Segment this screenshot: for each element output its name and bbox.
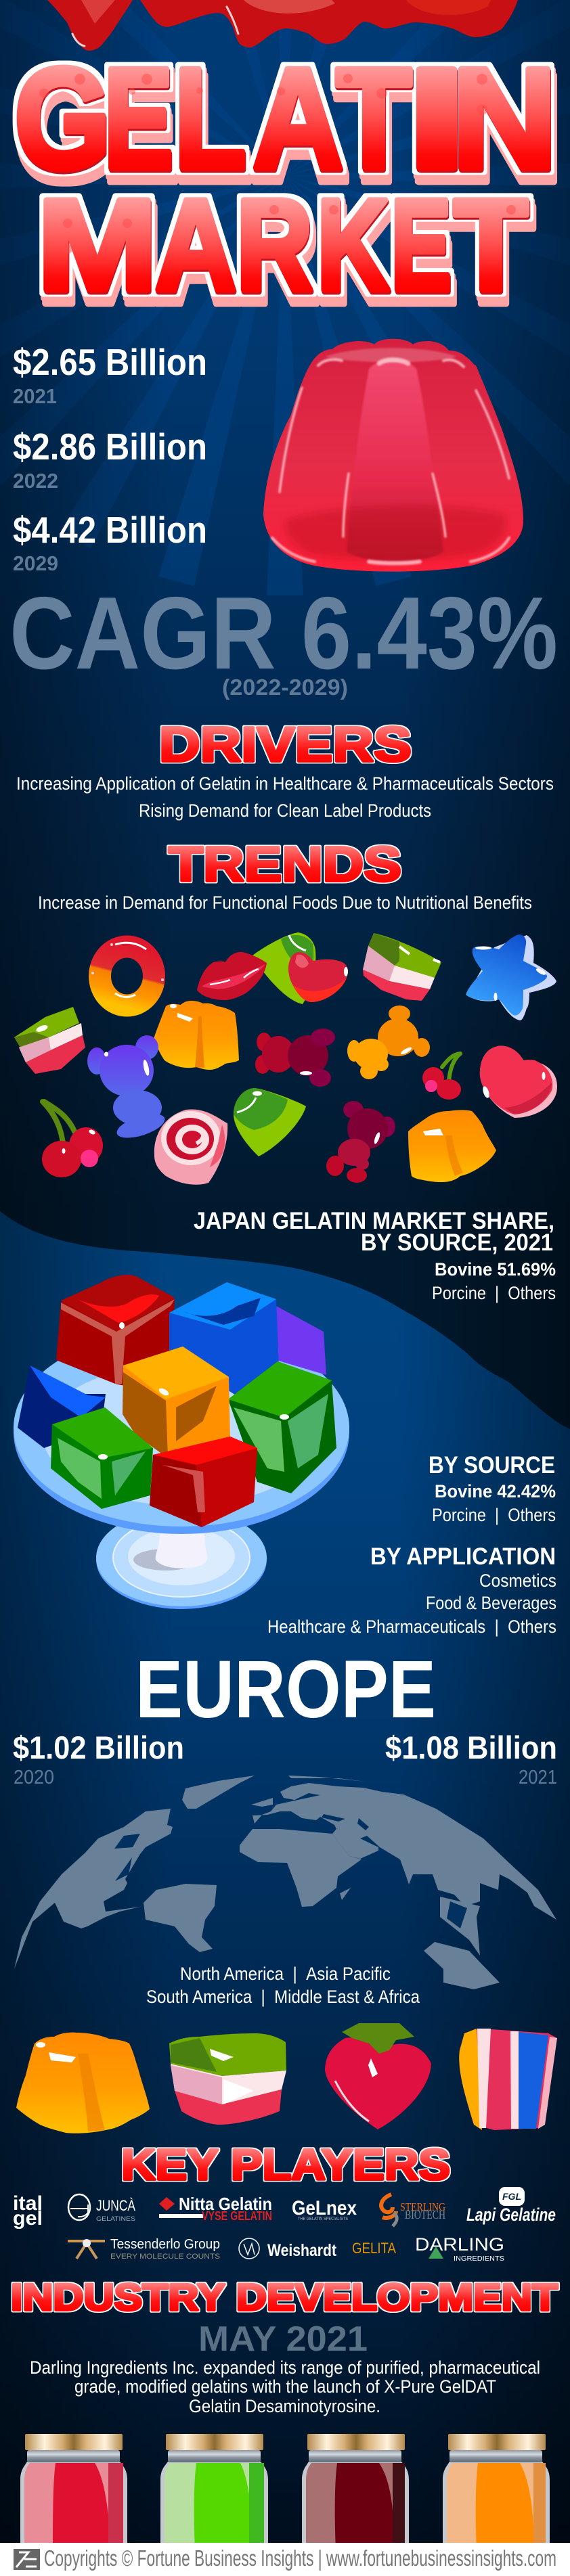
development description xyxy=(30,2357,540,2416)
other regions list: North America | Asia Pacific xyxy=(180,1964,391,1984)
world map globe xyxy=(14,1776,556,1989)
logo: Darling Ingredients xyxy=(415,2234,504,2263)
logo: Sterling Biotech: STERLING xyxy=(400,2200,445,2213)
Europe 2021 value: $1.08 Billion xyxy=(385,1730,557,1765)
candy: orange mold xyxy=(16,2033,150,2133)
other regions list: South America | Middle East & Africa xyxy=(146,1987,420,2007)
footer bar xyxy=(0,2543,570,2576)
by source segment list: Bovine 42.42% xyxy=(435,1481,556,1501)
title word: Market: T xyxy=(454,172,528,317)
heading: Drivers: DRIVERS xyxy=(159,718,412,772)
candy: strawberry xyxy=(325,2023,431,2129)
by application segment list: Cosmetics xyxy=(479,1571,556,1591)
logo: Gelnex: THE GELATIN SPECIALISTS xyxy=(298,2217,348,2221)
logo: Nitta Gelatin: Nitta Gelatin xyxy=(179,2194,272,2214)
candy: ring xyxy=(91,943,164,1005)
candy: orange bear xyxy=(347,1005,430,1079)
logo: Lapi Gelatine: FGL xyxy=(502,2191,521,2202)
candy: green wedge xyxy=(253,932,315,1004)
jar: dark red xyxy=(302,2434,409,2551)
by source segment list: Porcine | Others xyxy=(432,1505,556,1525)
development date: MAY 2021 xyxy=(198,2320,368,2359)
cube: blue back xyxy=(169,1282,279,1396)
other regions list xyxy=(146,1964,420,2007)
logo: Junca: JUNCÀ xyxy=(96,2197,135,2214)
logo: Italgel: ital xyxy=(13,2192,43,2215)
candy: blue star xyxy=(466,934,556,1020)
glass plate xyxy=(14,1329,349,1534)
stat: 2022 market value: 2022 xyxy=(13,469,58,493)
development description: Gelatin Desaminotyrosine. xyxy=(189,2396,380,2416)
logo: Gelnex: GeLnex xyxy=(292,2197,357,2219)
Europe 2021 value: 2021 xyxy=(519,1767,557,1788)
logo: Darling Ingredients: INGREDIENTS xyxy=(454,2255,504,2263)
candy: layered cube xyxy=(169,2033,286,2125)
region heading: Europe: EUROPE xyxy=(135,1643,436,1735)
CAGR value: (2022-2029) xyxy=(222,675,348,700)
title word: Market: A xyxy=(155,172,236,317)
candy: lips xyxy=(197,952,267,1000)
company logos xyxy=(13,2187,556,2263)
cube: red front xyxy=(150,1437,257,1527)
logo: Tessenderlo Group: EVERY MOLECULE COUNTS xyxy=(110,2253,220,2261)
stat: 2022 market value: $2.86 Billion xyxy=(13,426,207,468)
title word: Market: E xyxy=(391,172,452,317)
stat: 2021 market value: 2021 xyxy=(13,384,57,408)
title word: Gelatin: A xyxy=(253,38,343,198)
Japan market share text: BY SOURCE, 2021 xyxy=(361,1229,553,1256)
title word: Gelatin: T xyxy=(336,38,412,198)
logo: Italgel xyxy=(13,2192,43,2230)
stat: 2029 market value: $4.42 Billion xyxy=(13,509,207,551)
candy: striped jelly xyxy=(459,2029,557,2130)
jar: orange xyxy=(443,2434,550,2551)
Europe 2020 value: 2020 xyxy=(14,1767,54,1788)
logo: Tessenderlo Group: Tessenderlo Group xyxy=(110,2237,220,2252)
logo: Darling Ingredients: DARLING xyxy=(415,2234,504,2255)
logo: Nitta Gelatin: VYSE GELATIN xyxy=(202,2209,272,2223)
by source segment list xyxy=(429,1452,556,1525)
title word: Market: K xyxy=(317,172,389,317)
cube: red back xyxy=(56,1275,175,1395)
stat: 2021 market value: $2.65 Billion xyxy=(13,341,207,383)
candy: purple bear xyxy=(87,1035,168,1143)
candy: green wedge lower xyxy=(234,1088,306,1156)
drivers list xyxy=(16,773,554,821)
title: Gelatin Market xyxy=(14,38,557,317)
logo: Gelita: GELITA xyxy=(352,2240,396,2257)
candy: wine bear xyxy=(326,1101,395,1183)
candy: heart xyxy=(288,952,348,1002)
title word: Market: R xyxy=(236,172,313,317)
logo: Lapi Gelatine xyxy=(466,2187,556,2225)
Japan market share text xyxy=(194,1208,556,1303)
footer logo xyxy=(14,2549,40,2570)
candy: layered cube xyxy=(363,933,441,1001)
title word: Gelatin: E xyxy=(104,38,173,198)
candy: dark red bear xyxy=(255,1029,335,1087)
logo: Sterling Biotech xyxy=(381,2194,445,2226)
candy: left layered cube xyxy=(14,1007,85,1074)
candy: large cherries xyxy=(42,1102,103,1177)
title word: Gelatin: N xyxy=(452,38,557,198)
stat: 2021 market value xyxy=(13,341,207,408)
Europe 2020 value: $1.02 Billion xyxy=(13,1730,184,1765)
heading: Key Players: KEY PLAYERS xyxy=(121,2140,450,2189)
candy: swirl roll xyxy=(154,1109,227,1185)
scattered gummy candies xyxy=(14,932,557,1185)
heading: Industry Development: INDUSTRY DEVELOPMENT xyxy=(11,2276,558,2318)
heading: Trends: TRENDS xyxy=(169,838,401,892)
bowl of jelly cubes xyxy=(14,1275,349,1609)
logo: Junca: GELATINES xyxy=(96,2215,135,2222)
cube: blue left xyxy=(18,1365,106,1448)
by source segment list: BY SOURCE xyxy=(429,1452,555,1478)
logo: Junca xyxy=(68,2194,135,2222)
candy: red heart xyxy=(480,1046,557,1118)
jar: green xyxy=(160,2434,268,2551)
logo: Weishardt xyxy=(239,2238,337,2260)
development description: grade, modified gelatins with the launch of X-Pure GelDAT xyxy=(74,2376,496,2397)
title word: Gelatin: L xyxy=(174,38,246,198)
candy: small cherries xyxy=(422,1054,461,1100)
title word: Gelatin: G xyxy=(14,38,111,198)
candy: orange mold xyxy=(154,1001,239,1070)
pedestal base xyxy=(96,1509,267,1609)
cube: purple xyxy=(276,1306,326,1375)
Europe 2020 value xyxy=(13,1730,184,1788)
logo: Weishardt: Weishardt xyxy=(267,2241,337,2260)
Japan market share text: Porcine | Others xyxy=(432,1283,556,1303)
title word: Gelatin: I xyxy=(406,38,467,198)
stat: 2029 market value xyxy=(13,509,207,575)
title word: Gelatin xyxy=(14,38,557,198)
stat: 2029 market value: 2029 xyxy=(13,551,58,575)
title word: Market: M xyxy=(37,172,157,317)
Japan market share text: Bovine 51.69% xyxy=(435,1259,556,1280)
candy row xyxy=(16,2023,557,2133)
title word: Market xyxy=(37,172,528,317)
Europe 2021 value xyxy=(385,1730,557,1788)
cube: green left xyxy=(51,1407,153,1509)
logo: Tessenderlo Group xyxy=(68,2237,220,2261)
candy: orange mold lower xyxy=(408,1110,496,1182)
jar: red xyxy=(20,2434,127,2551)
red jelly drip xyxy=(47,0,518,51)
stat: 2022 market value xyxy=(13,426,207,493)
drivers list: Rising Demand for Clean Label Products xyxy=(139,800,431,821)
logo: Nitta Gelatin xyxy=(159,2194,272,2223)
cube: green right xyxy=(228,1361,336,1493)
logo: Sterling Biotech: BIOTECH xyxy=(405,2208,445,2221)
logo: Italgel: gel xyxy=(13,2207,43,2230)
by application segment list: BY APPLICATION xyxy=(370,1543,556,1570)
icon: big red jelly xyxy=(263,339,523,572)
by application segment list xyxy=(267,1543,556,1637)
cube: orange centre xyxy=(123,1347,230,1458)
